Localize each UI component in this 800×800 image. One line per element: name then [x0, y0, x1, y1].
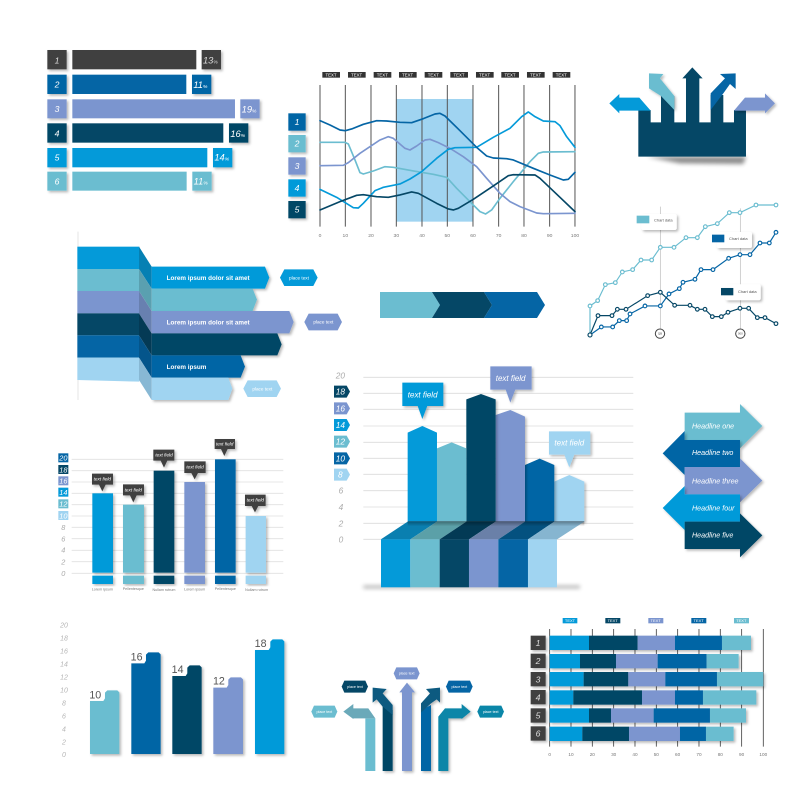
- y axis tags: 14: [59, 488, 67, 497]
- column tags: TEXT: [556, 72, 567, 77]
- arrow periwinkle center: [399, 683, 415, 771]
- y axis numbers: 10: [60, 687, 68, 694]
- column 12: [213, 676, 243, 754]
- arrow five: [685, 513, 762, 557]
- left axis line: [76, 232, 79, 400]
- x axis labels: 80: [521, 233, 527, 239]
- row 4 bar: 4: [55, 129, 60, 139]
- y axis numbers: 6: [339, 486, 344, 496]
- category labels: Pellentesque: [215, 587, 236, 591]
- callout periwinkle: text field: [496, 374, 526, 383]
- column tags: TEXT: [453, 72, 465, 77]
- top tags: TEXT: [694, 618, 704, 623]
- headlines: Headline four: [692, 505, 735, 513]
- x axis labels: 50: [445, 233, 450, 239]
- legend boxes: 5: [295, 205, 300, 215]
- y axis numbers: [335, 371, 345, 545]
- x axis labels: [548, 752, 768, 757]
- row 5 bar: 5: [55, 153, 60, 163]
- y axis numbers: 12: [60, 675, 68, 682]
- y axis numbers: 2: [60, 557, 65, 566]
- column bright: [408, 426, 437, 522]
- panel: notched column chart: [59, 622, 284, 759]
- row 2 bar: 11%: [193, 80, 208, 90]
- teal series: [588, 203, 778, 335]
- x axis labels: 60: [470, 233, 476, 239]
- column 12: 12: [213, 676, 225, 688]
- callouts: text field: [216, 442, 234, 447]
- column 18: [255, 638, 284, 754]
- y axis numbers: 0: [61, 569, 66, 578]
- x axis labels: 20: [368, 233, 374, 239]
- place text tags: [243, 269, 342, 397]
- y axis numbers: 0: [62, 752, 66, 759]
- panel: numbered horizontal bars: [47, 50, 260, 191]
- y axis tags: 8: [338, 470, 343, 480]
- y axis numbers: 14: [60, 662, 68, 669]
- top tags: [563, 618, 749, 623]
- panel: large stepped column chart: [334, 366, 633, 588]
- vertical grid lines: [550, 629, 763, 747]
- panel: multi-line marker chart with callouts: [588, 203, 778, 338]
- callouts: text field: [186, 464, 204, 469]
- arrow four: [663, 486, 740, 530]
- category labels: Lorem ipsum: [184, 587, 205, 591]
- circle labels: QB: [658, 332, 662, 336]
- row 2 bar: 2: [54, 79, 60, 89]
- x axis labels: 40: [632, 752, 638, 757]
- highlighted range: [396, 99, 473, 222]
- column 14: 14: [172, 664, 184, 676]
- ribbon bar teal: [152, 289, 257, 311]
- y axis numbers: 0: [339, 535, 344, 545]
- x axis labels: 60: [675, 752, 681, 757]
- headlines: Headline five: [692, 532, 733, 540]
- arrow deep teal right: [438, 704, 471, 771]
- row 4 bar: 16%: [230, 129, 246, 139]
- circle labels: 000: [738, 332, 743, 336]
- columns: [92, 459, 266, 573]
- y axis numbers: 16: [60, 649, 68, 656]
- callouts: [92, 439, 266, 512]
- arrow teal left: [343, 704, 375, 771]
- y axis tags: 10: [59, 511, 68, 520]
- row 4 bar: [47, 123, 248, 143]
- y axis numbers: 8: [61, 523, 66, 532]
- base shadow: [363, 586, 580, 588]
- place text tags: place text: [317, 710, 332, 714]
- y axis tags: 10: [336, 453, 345, 463]
- y axis numbers: 20: [59, 622, 68, 629]
- column tags: TEXT: [479, 72, 491, 77]
- blue series: [590, 230, 778, 335]
- callout: navy chart data: Chart data: [738, 289, 757, 294]
- x axis labels: 90: [547, 233, 553, 239]
- axis circles: [655, 329, 745, 338]
- y axis tags: 20: [58, 454, 68, 463]
- callout: navy chart data: [721, 284, 761, 300]
- stacked row 6: [550, 727, 734, 741]
- x axis labels: 30: [611, 752, 617, 757]
- row 2 bar: [47, 75, 211, 94]
- callouts: text field: [155, 453, 173, 458]
- ribbon labels: [167, 275, 251, 371]
- headlines: Headline two: [692, 449, 733, 457]
- column 18: 18: [255, 638, 267, 650]
- y axis tags: 18: [59, 465, 68, 474]
- column teal: [437, 442, 466, 522]
- panel: stacked horizontal bars: [531, 618, 768, 757]
- place text tags: place text: [483, 710, 498, 714]
- callout: teal chart data: Chart data: [654, 217, 673, 222]
- row 5 bar: [47, 148, 232, 167]
- callout: blue chart data: Chart data: [729, 236, 748, 241]
- column tags: TEXT: [325, 72, 337, 77]
- grid lines: [72, 459, 283, 573]
- row 5 bar: 14%: [214, 153, 230, 163]
- y axis tags: 14: [336, 420, 345, 430]
- y axis tags: 12: [59, 500, 67, 509]
- x axis labels: 100: [571, 233, 579, 239]
- category labels: Lorem ipsum: [92, 587, 113, 591]
- arrow one: [685, 404, 762, 448]
- place text tags: place text: [347, 685, 363, 689]
- place text tags: place text: [451, 685, 467, 689]
- column periwinkle: [496, 410, 525, 522]
- column 16: [131, 651, 161, 754]
- arrow left: [609, 94, 651, 113]
- ribbon bar light: [152, 378, 232, 400]
- legend boxes: [288, 113, 306, 218]
- x axis labels: 40: [419, 233, 425, 239]
- row 3 bar: 3: [55, 104, 60, 114]
- y axis numbers: [59, 622, 68, 759]
- callout light: text field: [554, 439, 585, 448]
- row 6 bar: [47, 172, 212, 191]
- headlines: Headline three: [692, 477, 739, 485]
- y axis numbers: 6: [61, 534, 66, 543]
- y axis tags: 16: [59, 477, 68, 486]
- callouts: text field: [94, 477, 111, 482]
- y axis tags: [58, 453, 68, 520]
- row 1 bar: 1: [55, 55, 60, 65]
- x axis labels: 30: [394, 233, 399, 239]
- y axis numbers: 8: [62, 701, 66, 708]
- column tags: TEXT: [402, 72, 414, 77]
- panel: stepped ribbon list: [77, 232, 342, 400]
- y axis numbers: 18: [60, 636, 68, 643]
- stacked row 2: [550, 654, 739, 668]
- navy series: [588, 290, 778, 337]
- row 6 bar: 11%: [194, 177, 208, 187]
- column tags: TEXT: [428, 72, 439, 77]
- y axis tags: [334, 386, 350, 481]
- left stack: [77, 247, 139, 382]
- column 14: [172, 664, 202, 754]
- category labels: Pellentesque: [123, 587, 144, 591]
- arrow blue upper right: [421, 688, 440, 771]
- x axis labels: 0: [548, 752, 551, 757]
- column light: [554, 475, 584, 522]
- y axis numbers: 20: [335, 371, 345, 381]
- reference lines: [660, 207, 740, 329]
- panel: branching arrows: [311, 667, 504, 771]
- panel: small column chart: [58, 439, 283, 592]
- x axis labels: 50: [654, 752, 659, 757]
- callout bright: text field: [408, 390, 438, 399]
- y axis numbers: 2: [61, 739, 66, 746]
- callout light: [549, 431, 590, 467]
- legend boxes: 3: [295, 161, 300, 171]
- legend chips: [92, 576, 266, 584]
- data lines: [320, 112, 575, 214]
- arrow bar: three chevrons: [380, 292, 545, 318]
- top tags: TEXT: [651, 618, 661, 623]
- arrow navy upper left: [373, 688, 393, 771]
- column tags: TEXT: [351, 72, 363, 77]
- arrow upper right: [711, 73, 736, 110]
- slanted band: [381, 521, 584, 539]
- x axis labels: 20: [590, 752, 595, 757]
- column navy: [466, 394, 496, 522]
- grid lines: [363, 377, 633, 539]
- chevron blue: [484, 292, 545, 318]
- stacked row 3: [550, 672, 763, 686]
- y axis numbers: 4: [339, 502, 344, 512]
- column tags: TEXT: [377, 72, 388, 77]
- lower columns: [381, 539, 557, 587]
- x axis labels: 70: [696, 752, 702, 757]
- x axis labels: 70: [496, 233, 502, 239]
- row 1 bar: 13%: [203, 55, 218, 65]
- callout: teal chart data: [637, 214, 677, 230]
- ribbon bar navy: [152, 333, 282, 355]
- place text tags: place text: [399, 672, 414, 676]
- stacked row 1: [550, 636, 751, 650]
- row number boxes: 2: [535, 656, 541, 666]
- category labels: Nullam rutrum: [153, 588, 175, 592]
- chevron navy: [432, 292, 492, 318]
- y axis tags: 18: [336, 387, 345, 397]
- base shadow: [647, 157, 746, 164]
- y axis numbers: 6: [62, 713, 66, 720]
- y axis tags: 12: [336, 437, 345, 447]
- row number boxes: [531, 636, 546, 741]
- legend boxes: 2: [294, 139, 300, 149]
- stacked row 5: [550, 708, 746, 723]
- arrow three: [685, 458, 762, 502]
- column 10: [89, 689, 119, 754]
- x axis labels: 10: [343, 233, 348, 239]
- crown base: [638, 67, 746, 157]
- place text tags: place text: [289, 275, 310, 280]
- ribbon bars: [152, 267, 269, 289]
- ribbon bar periwinkle: [152, 311, 294, 333]
- x axis labels: 100: [759, 752, 768, 757]
- column tags: [322, 72, 570, 78]
- legend boxes: 4: [295, 183, 300, 193]
- column 10: 10: [89, 689, 101, 701]
- y axis numbers: 4: [62, 726, 66, 733]
- legend boxes: 1: [295, 117, 300, 127]
- ribbon labels: Lorem ipsum: [167, 364, 207, 371]
- place text tags: [311, 667, 504, 718]
- callouts: text field: [247, 498, 264, 503]
- top tags: TEXT: [608, 618, 618, 623]
- circle labels: [658, 332, 743, 336]
- column blue: [525, 459, 554, 522]
- panel: headline arrows: [663, 404, 762, 557]
- x axis labels: 90: [739, 752, 745, 757]
- vertical grid lines: [320, 85, 575, 227]
- callout: blue chart data: [712, 232, 752, 248]
- callouts: text field: [125, 487, 142, 492]
- place text tags: place text: [313, 320, 334, 325]
- arrow two: [663, 431, 740, 475]
- stacked row 4: [550, 690, 756, 705]
- row 3 bar: 19%: [242, 104, 257, 114]
- chevron teal: [380, 292, 440, 318]
- callout periwinkle: [490, 366, 532, 403]
- y axis numbers: [60, 523, 66, 578]
- y axis numbers: 2: [338, 518, 344, 528]
- headlines: [692, 423, 739, 540]
- arrow right: [734, 93, 775, 113]
- x axis labels: 80: [718, 752, 723, 757]
- row 6 bar: 6: [55, 176, 60, 186]
- place text tags: place text: [252, 386, 273, 391]
- y axis tags: 16: [336, 403, 345, 413]
- ribbon bar blue: [152, 355, 245, 378]
- headlines: Headline one: [692, 423, 734, 431]
- panel: five-arrow crown diagram: [609, 67, 775, 164]
- row number boxes: 3: [536, 674, 541, 684]
- row 3 bar: [47, 99, 260, 118]
- callout bright: [402, 383, 443, 419]
- column tags: TEXT: [530, 72, 542, 77]
- arrow upper left: [649, 73, 674, 110]
- row number boxes: 4: [536, 692, 541, 702]
- panel: line chart with highlighted range: [288, 72, 579, 239]
- category labels: Nullam rutrum: [245, 588, 268, 592]
- top tags: TEXT: [736, 618, 747, 623]
- category labels: [92, 587, 268, 592]
- top tags: TEXT: [565, 618, 576, 623]
- x axis labels: [319, 233, 579, 239]
- row number boxes: 1: [536, 638, 541, 648]
- row number boxes: 6: [536, 729, 541, 739]
- x axis labels: 10: [568, 752, 574, 757]
- y axis numbers: 4: [61, 546, 65, 555]
- column tags: TEXT: [504, 72, 516, 77]
- column 16: 16: [131, 651, 143, 663]
- x axis labels: 0: [319, 233, 322, 239]
- row number boxes: 5: [536, 711, 541, 721]
- ribbon labels: Lorem ipsum dolor sit amet: [167, 320, 251, 327]
- ribbon labels: Lorem ipsum dolor sit amet: [167, 275, 251, 282]
- slanted connectors: [139, 247, 152, 400]
- row 1 bar: [47, 50, 221, 69]
